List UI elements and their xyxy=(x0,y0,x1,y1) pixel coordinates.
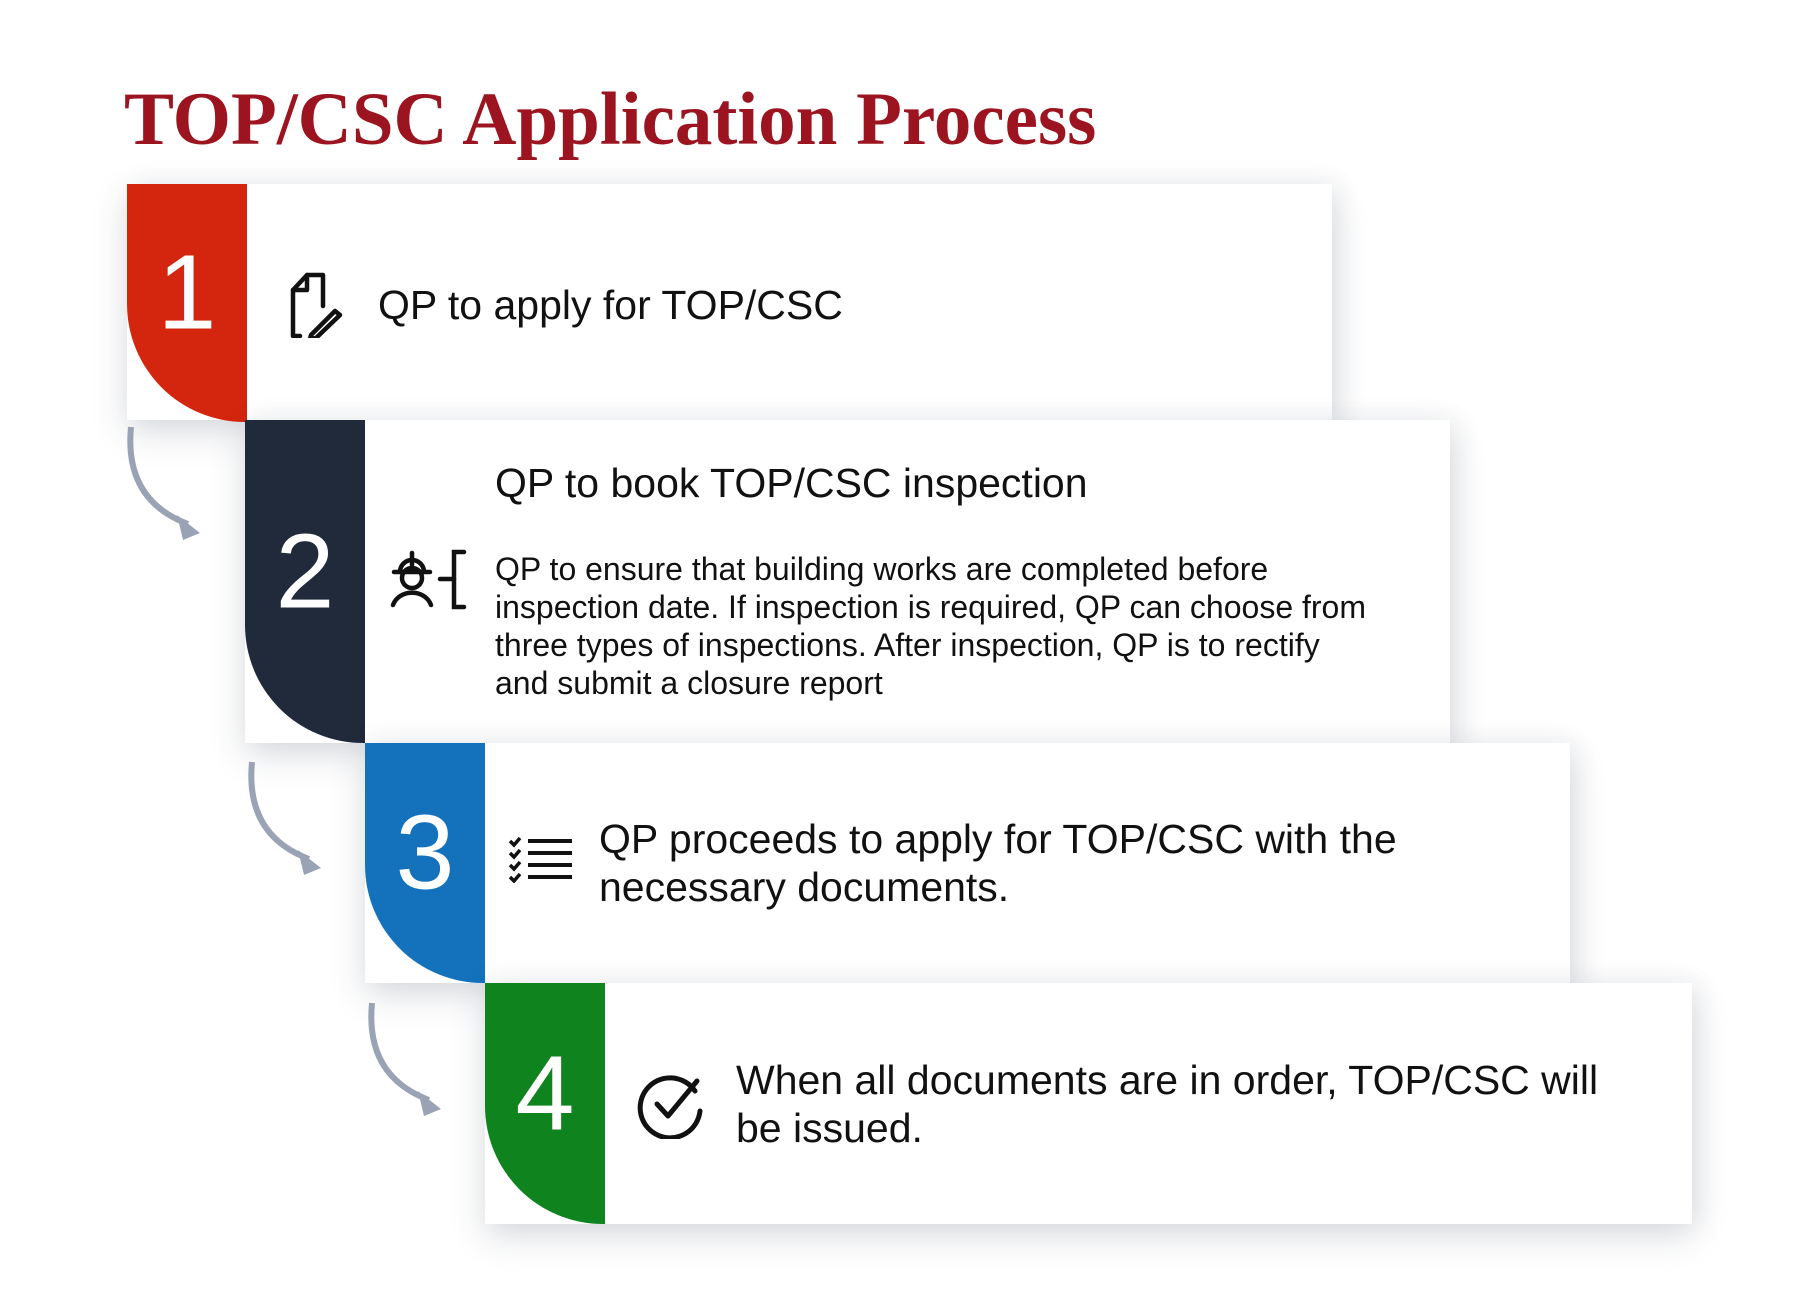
step 1 text: QP to apply for TOP/CSC xyxy=(378,282,843,328)
step 2 number tab: 2 xyxy=(276,512,334,630)
step 2 number tab xyxy=(245,420,365,743)
step 2 heading: QP to book TOP/CSC inspection xyxy=(495,460,1088,506)
icon: check circle xyxy=(638,1075,702,1139)
title: TOP/CSC Application Process xyxy=(124,78,1096,161)
icon: document edit xyxy=(290,272,342,338)
step 4 number tab: 4 xyxy=(516,1034,574,1152)
step 1 number tab xyxy=(127,184,247,422)
step 2 body text: QP to ensure that building works are completed before inspection date. If inspection is required, QP can choose from three types of inspections. After inspection, QP is to rectify and submit a closure report xyxy=(495,551,1366,701)
icon: inspector xyxy=(390,550,466,610)
icon: checklist xyxy=(508,836,572,883)
step 1 number tab: 1 xyxy=(158,233,216,351)
step 3 number tab: 3 xyxy=(396,793,454,911)
step 3 number tab xyxy=(365,743,485,983)
step 3 text: QP proceeds to apply for TOP/CSC with the necessary documents. xyxy=(599,816,1397,910)
step 4 number tab xyxy=(485,983,605,1224)
panel: step 3 xyxy=(365,743,1570,983)
panel: step 1 xyxy=(127,184,1332,420)
panel: step 2 xyxy=(245,420,1450,743)
step 4 text: When all documents are in order, TOP/CSC will be issued. xyxy=(736,1057,1598,1151)
panel: step 4 xyxy=(485,983,1692,1224)
